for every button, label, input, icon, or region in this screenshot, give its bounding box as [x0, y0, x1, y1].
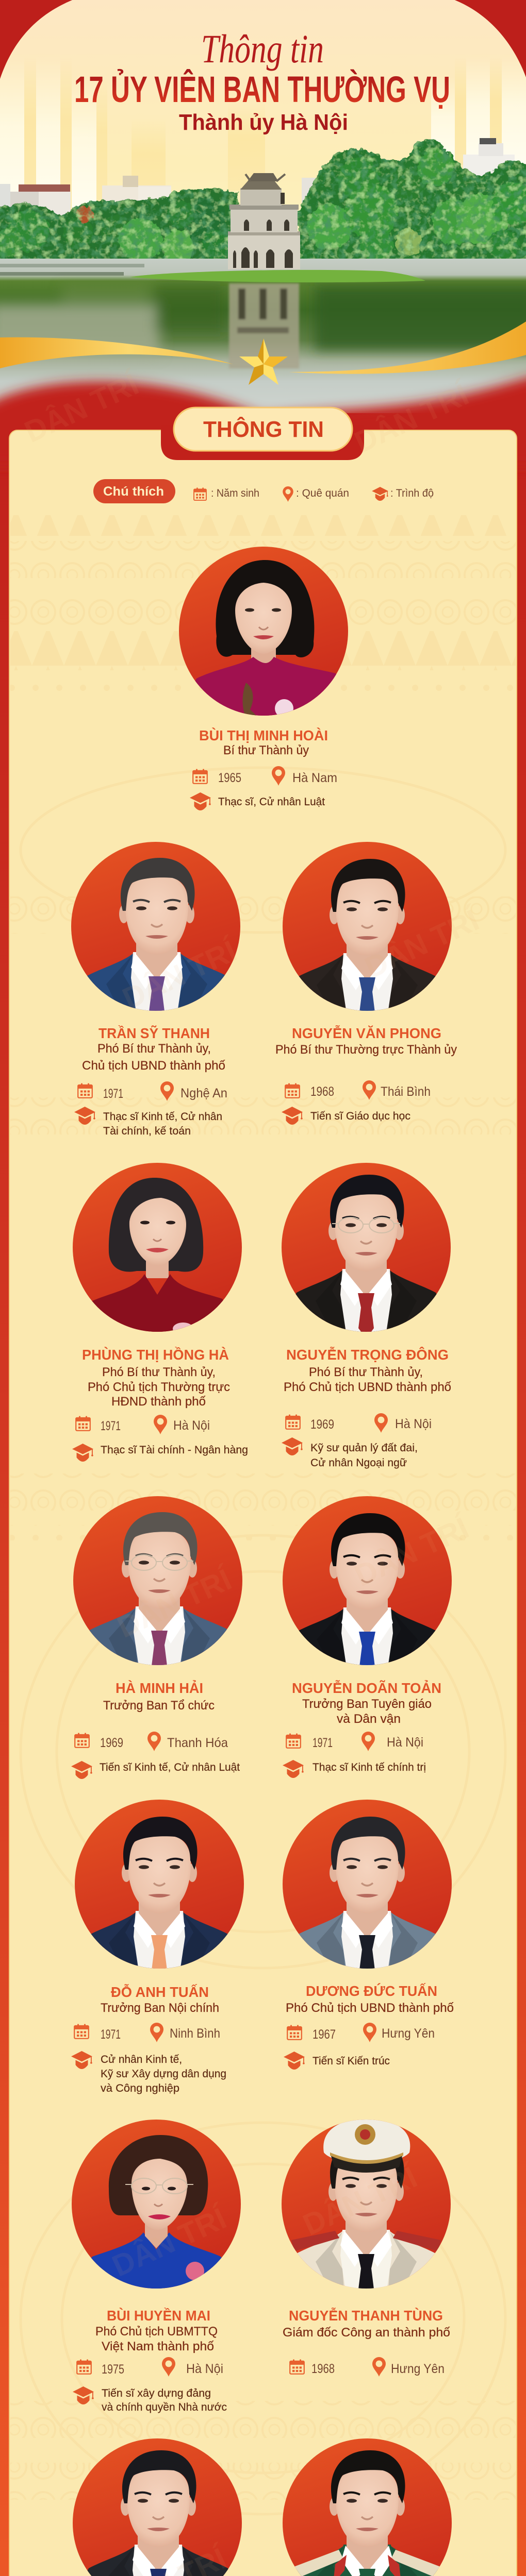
role — [95, 2325, 218, 2353]
birth year: 1968 — [310, 1084, 334, 1099]
red corner left — [0, 0, 72, 79]
role: Trưởng Ban Tuyên giáo — [302, 1697, 432, 1711]
icon: calendar — [76, 1416, 90, 1431]
icon: calendar — [286, 1415, 300, 1429]
icon: pin — [160, 1081, 174, 1101]
name: BÙI THỊ MINH HOÀI — [199, 727, 328, 743]
profile: Bùi Huyền Mai — [63, 2120, 249, 2413]
education — [310, 1442, 418, 1469]
portrait — [283, 1496, 452, 1665]
education: Tài chính, kế toán — [103, 1125, 191, 1137]
icon: calendar — [287, 2025, 302, 2040]
icon: pin — [272, 766, 285, 786]
role: Phó Chủ tịch UBND thành phố — [284, 1380, 451, 1394]
role: Việt Nam thành phố — [102, 2340, 214, 2353]
gold ribbon left — [0, 337, 233, 368]
education: Thạc sĩ Tài chính - Ngân hàng — [101, 1444, 248, 1456]
education: Tiến sĩ Giáo dục học — [310, 1110, 410, 1122]
trees right — [298, 139, 526, 268]
hometown: Thái Bình — [381, 1084, 431, 1099]
legend title: Chú thích — [103, 484, 164, 499]
name: DƯƠNG ĐỨC TUẤN — [306, 1983, 437, 1999]
heading: THÔNG TIN pill: THÔNG TIN — [203, 416, 324, 442]
birth year: 1971 — [313, 1736, 333, 1750]
name: BÙI HUYỀN MAI — [107, 2308, 210, 2324]
role: Phó Chủ tịch UBMTTQ — [95, 2325, 218, 2338]
role — [284, 1365, 451, 1394]
birth year: 1971 — [101, 2027, 121, 2042]
role — [88, 1365, 230, 1409]
birth year: 1969 — [310, 1417, 334, 1432]
portrait — [274, 2438, 460, 2576]
watermarks: DÂN TRÍ — [350, 378, 474, 460]
name: NGUYỄN VĂN PHONG — [292, 1025, 441, 1041]
portrait — [75, 1800, 244, 1969]
profile: Đỗ Anh Tuấn — [67, 1800, 252, 2094]
icon: calendar — [193, 769, 207, 784]
education — [102, 2387, 227, 2413]
hometown: Hà Nội — [186, 2362, 223, 2376]
role: Giám đốc Công an thành phố — [283, 2326, 450, 2340]
icon: calendar — [74, 2024, 89, 2039]
hometown: Hà Nội — [395, 1417, 432, 1431]
hometown: Hà Nam — [292, 771, 337, 785]
watermarks: DÂN TRÍ — [107, 2201, 232, 2283]
Turtle Tower — [228, 173, 300, 269]
watermarks: DÂN TRÍ — [298, 2160, 423, 2242]
icon: calendar — [286, 1733, 301, 1748]
education: Tiến sĩ xây dựng đảng — [102, 2387, 211, 2399]
watermarks: DÂN TRÍ — [112, 1563, 237, 1645]
role: Phó Bí thư Thành ủy, — [102, 1365, 216, 1379]
portrait — [65, 2438, 251, 2576]
icon: gold star — [239, 338, 288, 385]
background buildings — [0, 138, 515, 218]
profile: Nguyễn Trọng Đông — [273, 1163, 459, 1469]
red corner right — [455, 0, 526, 77]
icon: pin — [150, 2023, 163, 2042]
education: và Công nghiệp — [101, 2082, 179, 2094]
heading: THÔNG TIN pill — [174, 408, 352, 451]
profile: Nguyễn Thanh Tùng — [273, 2119, 459, 2377]
portrait — [283, 1800, 452, 1969]
education: Cử nhân Ngoại ngữ — [310, 1457, 407, 1469]
birth year: 1967 — [313, 2027, 336, 2042]
profile: Dương Đức Tuấn — [274, 1800, 460, 2070]
birth year: 1965 — [218, 771, 241, 785]
icon: pin — [363, 1080, 376, 1100]
role — [302, 1697, 432, 1726]
legend — [93, 479, 434, 503]
hometown: Hà Nội — [173, 1418, 210, 1433]
role: HĐND thành phố — [111, 1395, 206, 1409]
role — [82, 1042, 225, 1073]
education: Kỹ sư Xây dựng dân dụng — [101, 2068, 226, 2080]
icon: calendar — [75, 1733, 89, 1748]
icon: graduation hat — [282, 1107, 303, 1125]
education: Tiến sĩ Kinh tế, Cử nhân Luật — [100, 1761, 240, 1773]
portrait — [72, 2120, 241, 2289]
hometown: Hưng Yên — [382, 2026, 435, 2041]
role: và Dân vận — [337, 1712, 401, 1726]
gold ribbon right — [289, 321, 526, 374]
education: Thạc sĩ Kinh tế chính trị — [313, 1761, 426, 1773]
birth year: 1971 — [103, 1087, 123, 1101]
role: Trưởng Ban Nội chính — [101, 2001, 219, 2015]
icon: graduation hat — [71, 2051, 92, 2069]
trees left — [0, 188, 238, 263]
icon: graduation hat — [190, 792, 211, 810]
legend title — [93, 479, 175, 503]
portrait — [283, 842, 452, 1011]
name: ĐỖ ANH TUẤN — [111, 1984, 209, 2000]
profile: Bùi Thị Minh Hoài — [171, 547, 356, 810]
hometown: Nghệ An — [180, 1086, 227, 1100]
portrait — [179, 547, 348, 716]
tab notch — [161, 425, 364, 460]
portrait — [71, 842, 240, 1011]
icon: graduation hat — [74, 1107, 95, 1125]
education: Thạc sĩ Kinh tế, Cử nhân — [103, 1111, 222, 1123]
education: Kỹ sư quản lý đất đai, — [310, 1442, 418, 1454]
hometown: Thanh Hóa — [167, 1736, 228, 1750]
name: PHÙNG THỊ HỒNG HÀ — [82, 1347, 229, 1363]
birth year: 1971 — [101, 1419, 121, 1433]
name: NGUYỄN THANH TÙNG — [289, 2308, 443, 2324]
profile: Trần Sỹ Thanh — [64, 842, 250, 1137]
icon: pin — [361, 1732, 375, 1751]
role: Phó Chủ tịch UBND thành phố — [286, 2001, 454, 2015]
name: NGUYỄN DOÃN TOẢN — [292, 1680, 441, 1696]
icon: pin — [162, 2357, 175, 2377]
icon: pin — [154, 1415, 167, 1434]
icon: graduation hat — [71, 1761, 92, 1779]
panel: header scene — [0, 0, 526, 466]
legend: birth year: : Năm sinh — [211, 487, 259, 499]
portrait — [282, 1163, 451, 1332]
watermarks: DÂN TRÍ — [20, 367, 144, 449]
subtitle: Thành ủy Hà Nội — [179, 110, 348, 135]
legend: birth year — [194, 487, 259, 500]
education: và chính quyền Nhà nước — [102, 2401, 227, 2413]
profile: Nguyễn Văn Phong — [274, 842, 460, 1125]
watermarks: DÂN TRÍ — [118, 934, 242, 1016]
birth year: 1969 — [100, 1736, 123, 1750]
birth year: 1968 — [311, 2362, 335, 2376]
icon: pin — [363, 2023, 376, 2042]
role: Phó Chủ tịch Thường trực — [88, 1380, 230, 1394]
icon: calendar — [77, 2360, 91, 2374]
profile: Hà Minh Hải — [67, 1496, 252, 1779]
watermarks — [20, 367, 485, 2576]
icon: pin — [147, 1732, 161, 1751]
legend: hometown: : Quê quán — [296, 487, 349, 499]
lake water — [0, 259, 526, 413]
icon: calendar — [285, 1083, 300, 1098]
icon: graduation hat — [282, 1437, 303, 1455]
sky arch — [0, 0, 526, 412]
profile: Nguyễn Xuân Lưu — [65, 2438, 251, 2576]
education — [103, 1111, 222, 1137]
portrait — [73, 1163, 242, 1332]
red wave — [0, 372, 526, 466]
Turtle Tower island — [130, 270, 425, 282]
hometown: Hà Nội — [387, 1735, 423, 1750]
icon: graduation hat — [284, 2052, 305, 2070]
role: Chủ tịch UBND thành phố — [82, 1059, 225, 1073]
hometown: Ninh Bình — [170, 2026, 220, 2041]
role: Bí thư Thành ủy — [223, 743, 309, 757]
decorative pattern bands — [10, 515, 516, 2576]
portrait — [282, 2120, 451, 2289]
education: Cử nhân Kinh tế, — [101, 2054, 182, 2065]
legend: education — [372, 487, 434, 501]
birth year: 1975 — [102, 2362, 124, 2377]
hometown: Hưng Yên — [391, 2362, 445, 2376]
faint skyline pillars — [0, 57, 526, 211]
profile: Đào Văn Nhận — [274, 2438, 460, 2576]
icon: graduation hat — [73, 2386, 94, 2404]
legend: education: : Trình độ — [390, 487, 434, 499]
role: Trưởng Ban Tổ chức — [103, 1699, 215, 1713]
education: Tiến sĩ Kiến trúc — [313, 2055, 390, 2067]
name: TRẦN SỸ THANH — [98, 1025, 210, 1041]
watermarks: DÂN TRÍ — [350, 1511, 474, 1593]
role: Phó Bí thư Thành ủy, — [309, 1365, 423, 1379]
icon: calendar — [78, 1083, 92, 1098]
icon: pin — [372, 2357, 386, 2377]
watermarks: DÂN TRÍ — [360, 903, 485, 985]
education: Thạc sĩ, Cử nhân Luật — [218, 796, 325, 808]
icon: graduation hat — [72, 1444, 93, 1462]
profile: Phùng Thị Hồng Hà — [64, 1163, 250, 1462]
portrait — [73, 1496, 242, 1665]
role: Phó Bí thư Thường trực Thành ủy — [275, 1043, 457, 1057]
title script: Thông tin — [201, 26, 324, 71]
icon: graduation hat — [283, 1760, 304, 1778]
icon: pin — [374, 1413, 388, 1433]
profile: Nguyễn Doãn Toản — [274, 1496, 460, 1778]
legend: hometown — [283, 486, 349, 502]
education — [101, 2054, 226, 2094]
name: HÀ MINH HẢI — [116, 1680, 203, 1696]
name: NGUYỄN TRỌNG ĐÔNG — [286, 1346, 449, 1363]
role: Phó Bí thư Thành ủy, — [97, 1042, 211, 1056]
icon: calendar — [290, 2360, 304, 2374]
